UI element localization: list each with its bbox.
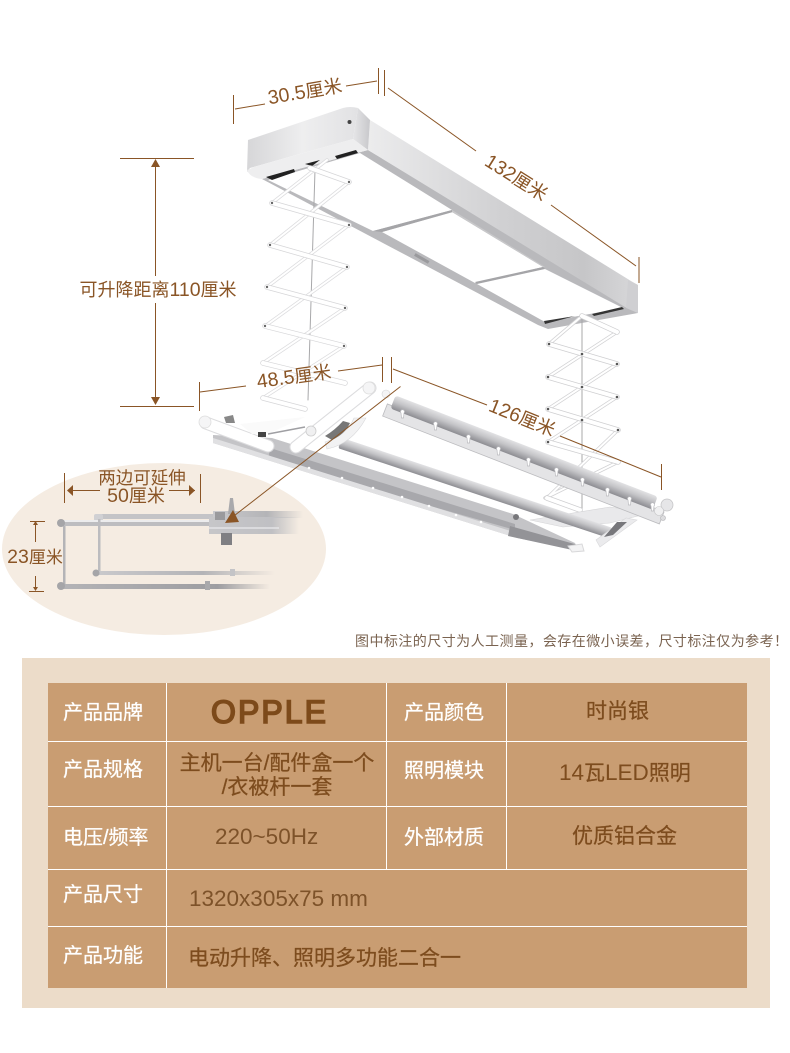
label line 2: 50厘米 — [107, 485, 165, 507]
outer lower tube — [60, 584, 270, 589]
unit underside frame — [262, 150, 638, 329]
rope — [581, 316, 583, 512]
table grid lines — [48, 683, 747, 988]
pointer arrow — [225, 386, 400, 523]
inset extended rack photo — [57, 498, 303, 590]
value: spec — [180, 752, 374, 799]
right scissor lift — [545, 316, 619, 512]
right end plate — [530, 507, 650, 527]
value: material: 优质铝合金 — [572, 825, 677, 848]
label: size: 产品尺寸 — [63, 884, 143, 906]
rail block — [209, 517, 299, 534]
dimension: lift distance — [79, 158, 237, 406]
label: voltage: 电压/频率 — [63, 827, 149, 849]
drying rack — [199, 382, 673, 552]
label: 126厘米 — [486, 395, 558, 441]
label: 23厘米 — [7, 546, 63, 568]
value: voltage: 220~50Hz — [215, 824, 318, 849]
right fold arm — [296, 388, 370, 447]
spec table — [48, 683, 747, 988]
keyhole slots on rail — [400, 410, 654, 511]
label: 48.5厘米 — [255, 361, 333, 393]
unit end lip — [247, 139, 368, 179]
label: material: 外部材质 — [404, 827, 484, 849]
product diagram — [2, 68, 674, 635]
light panel near — [268, 153, 452, 231]
rear upper tube — [97, 514, 219, 519]
measurement note: 图中标注的尺寸为人工测量，会存在微小误差，尺寸标注仅为参考！ — [355, 633, 788, 649]
unit corner face — [353, 108, 370, 150]
front rail — [213, 435, 578, 550]
rear hook rail — [383, 404, 664, 524]
dimension: 126cm — [393, 369, 662, 490]
label: 30.5厘米 — [266, 75, 344, 109]
unit end face — [247, 107, 358, 172]
light panel middle — [382, 212, 543, 283]
front rail dots — [308, 467, 482, 523]
rear tube — [390, 395, 658, 510]
label: lighting: 照明模块 — [404, 760, 484, 782]
left fold arm — [206, 423, 268, 446]
dimension: 23cm — [7, 521, 63, 592]
label: 可升降距离110厘米 — [79, 279, 237, 301]
value: size: 1320x305x75 mm — [189, 886, 368, 911]
dimension: 50cm extension — [64, 468, 200, 507]
panel: specification table background — [22, 658, 770, 1008]
value: spec: /衣被杆一套 — [222, 776, 332, 799]
outer upper tube — [60, 520, 210, 526]
left scissor lift — [263, 160, 350, 409]
dimension: 132cm — [388, 88, 639, 283]
value: lighting: 14瓦LED照明 — [559, 760, 691, 785]
rope — [308, 170, 315, 400]
OPPLE logo: OPPLE — [211, 694, 326, 730]
dimension: 48.5cm — [200, 357, 392, 411]
light panel far — [477, 269, 623, 322]
vertical connectors — [63, 526, 66, 585]
inset ellipse background — [2, 463, 326, 635]
inner lower tube — [95, 571, 275, 575]
middle tube — [338, 438, 612, 538]
unit long side — [368, 120, 638, 313]
value: spec: 主机一台/配件盒一个 — [180, 752, 374, 775]
front rail end cap — [568, 544, 584, 552]
tube to the right of block — [213, 511, 303, 518]
label: function: 产品功能 — [63, 945, 143, 967]
label line 1: 两边可延伸 — [98, 468, 186, 488]
value: colour: 时尚银 — [586, 700, 649, 723]
ceiling unit — [247, 107, 638, 329]
black end slots — [266, 169, 295, 180]
label: colour: 产品颜色 — [404, 702, 484, 724]
label: brand: 产品品牌 — [63, 702, 143, 724]
label: 132厘米 — [481, 150, 551, 206]
dimension: 30.5cm — [234, 68, 384, 124]
value: function: 电动升降、照明多功能二合一 — [188, 947, 461, 970]
label: spec: 产品规格 — [63, 759, 143, 781]
right end bracket — [596, 518, 637, 547]
